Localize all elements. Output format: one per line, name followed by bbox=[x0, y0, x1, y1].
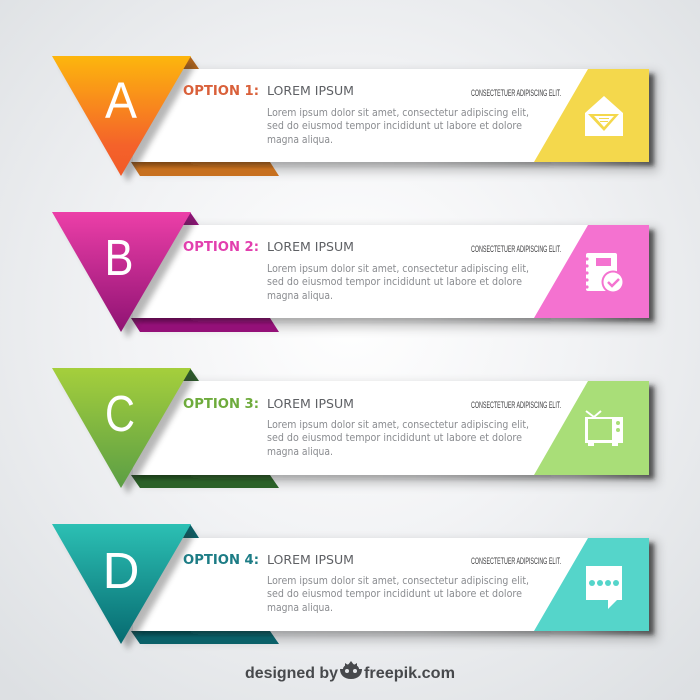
caption D: CONSECTETUER ADIPISCING ELIT. bbox=[471, 556, 561, 566]
icon: notebook with check bbox=[585, 253, 624, 294]
triangle D bbox=[52, 524, 191, 644]
footer: freepik credit: designed by bbox=[245, 665, 338, 682]
text block C: magna aliqua. bbox=[267, 446, 333, 458]
text block D: magna aliqua. bbox=[267, 602, 333, 614]
card: option B bbox=[133, 225, 649, 318]
triangle A bbox=[52, 56, 191, 176]
icon: freepik logo bbox=[340, 661, 362, 679]
text block A: Lorem ipsum dolor sit amet, consectetur adipiscing elit, bbox=[267, 107, 529, 119]
right colour block C bbox=[534, 381, 649, 475]
text block D: sed do eiusmod tempor incididunt ut labore et dolore bbox=[267, 588, 522, 600]
letter C: C bbox=[105, 385, 135, 442]
text block B: sed do eiusmod tempor incididunt ut labore et dolore bbox=[267, 276, 522, 288]
heading B: LOREM IPSUM bbox=[267, 239, 354, 254]
heading A: LOREM IPSUM bbox=[267, 83, 354, 98]
text block C bbox=[267, 419, 529, 458]
text block A: magna aliqua. bbox=[267, 134, 333, 146]
panel: option D bbox=[52, 524, 658, 650]
triangle B bbox=[52, 212, 191, 332]
icon: television bbox=[585, 411, 623, 446]
letter A: A bbox=[105, 72, 137, 129]
footer: freepik credit: freepik.com bbox=[364, 665, 455, 682]
text block B bbox=[267, 263, 529, 302]
icon: envelope bbox=[585, 96, 623, 136]
letter B: B bbox=[104, 229, 134, 286]
panel: option A bbox=[52, 56, 658, 182]
panel: option C bbox=[52, 368, 658, 494]
label: option 1: OPTION 1: bbox=[183, 84, 259, 99]
right colour block B bbox=[534, 225, 649, 318]
card: option A bbox=[133, 69, 649, 162]
heading D: LOREM IPSUM bbox=[267, 552, 354, 567]
label: option 2: OPTION 2: bbox=[183, 240, 259, 255]
heading C: LOREM IPSUM bbox=[267, 396, 354, 411]
letter D: D bbox=[103, 542, 139, 599]
label: option 3: OPTION 3: bbox=[183, 397, 259, 412]
card: option C bbox=[133, 381, 649, 475]
triangle C bbox=[52, 368, 191, 488]
icon: speech bubble bbox=[586, 566, 622, 609]
panel: option B bbox=[52, 212, 658, 338]
card: option D bbox=[133, 538, 649, 631]
right colour block D bbox=[534, 538, 649, 631]
text block B: Lorem ipsum dolor sit amet, consectetur adipiscing elit, bbox=[267, 263, 529, 275]
text block C: Lorem ipsum dolor sit amet, consectetur adipiscing elit, bbox=[267, 419, 529, 431]
footer: freepik credit bbox=[245, 661, 455, 682]
text block A bbox=[267, 107, 529, 146]
caption A: CONSECTETUER ADIPISCING ELIT. bbox=[471, 88, 561, 98]
text block C: sed do eiusmod tempor incididunt ut labore et dolore bbox=[267, 432, 522, 444]
text block A: sed do eiusmod tempor incididunt ut labore et dolore bbox=[267, 120, 522, 132]
text block D bbox=[267, 575, 529, 614]
caption B: CONSECTETUER ADIPISCING ELIT. bbox=[471, 244, 561, 254]
text block D: Lorem ipsum dolor sit amet, consectetur adipiscing elit, bbox=[267, 575, 529, 587]
caption C: CONSECTETUER ADIPISCING ELIT. bbox=[471, 400, 561, 410]
right colour block A bbox=[534, 69, 649, 162]
label: option 4: OPTION 4: bbox=[183, 553, 259, 568]
text block B: magna aliqua. bbox=[267, 290, 333, 302]
